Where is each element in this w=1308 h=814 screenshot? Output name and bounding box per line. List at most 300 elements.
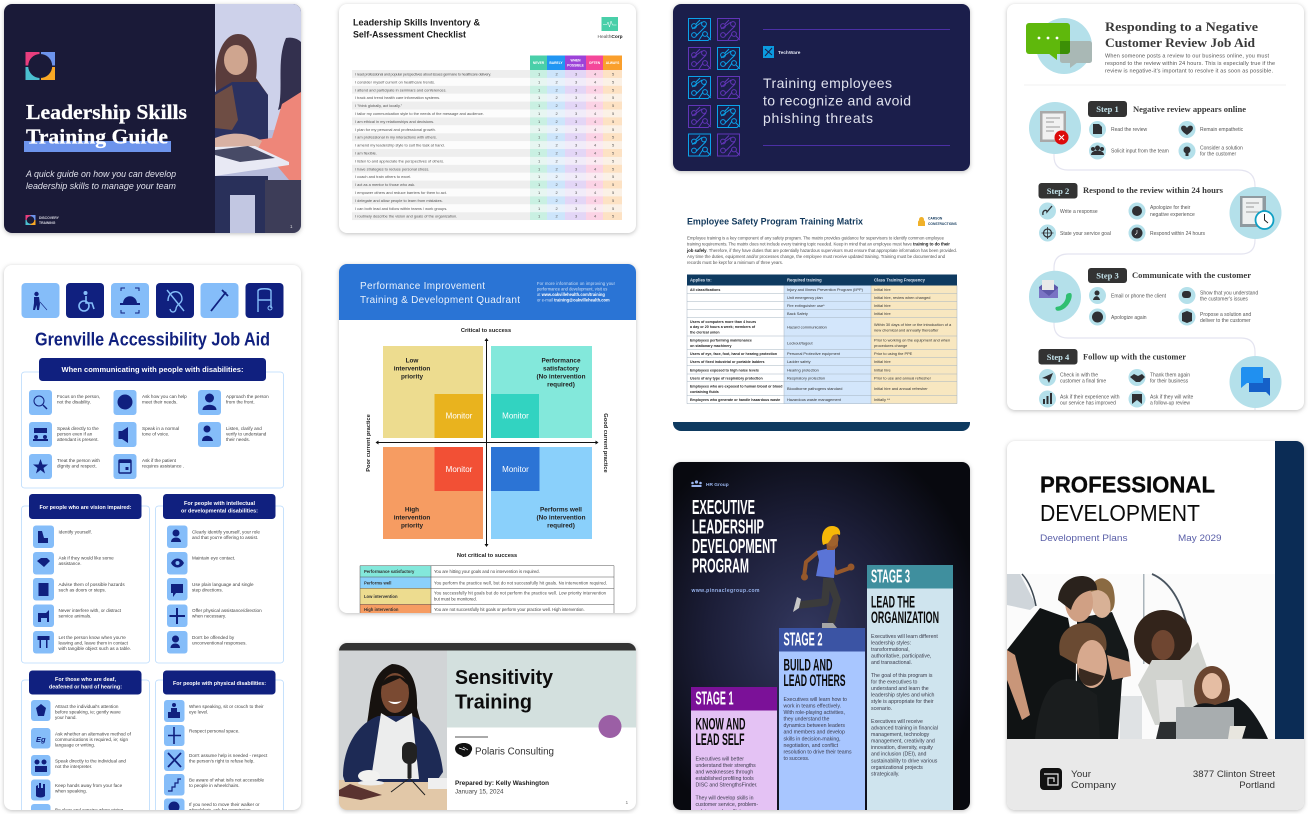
table: I attend and participate in seminars and conferences. bbox=[355, 87, 446, 92]
quadrant: high intervention: Monitor bbox=[446, 465, 473, 474]
section: vision impaired: Let the person know when you're bbox=[58, 635, 126, 640]
brand: hr group bbox=[691, 480, 729, 488]
legend table: Performance satisfactory bbox=[364, 569, 415, 574]
intro paragraph: job safely. Therefore, if they have duties that are potentially hazardous supervisors must ensure that appropriate information has been provided. bbox=[686, 248, 957, 253]
stage 2: and members and develop bbox=[784, 730, 845, 736]
logo: carson constructions bbox=[918, 216, 958, 226]
matrix table: Ladder safety bbox=[787, 359, 811, 364]
panel: leadership skills training guide bbox=[4, 4, 301, 233]
axis labels: Not critical to success bbox=[457, 553, 517, 559]
section: deaf or hard of hearing: deafened or hard of hearing: bbox=[49, 684, 122, 690]
subtitle bbox=[1040, 533, 1222, 543]
logo: your company: Your bbox=[1071, 769, 1091, 779]
matrix table: Initial hire bbox=[874, 367, 891, 372]
quadrant: low intervention bbox=[383, 346, 483, 438]
step 4: Follow up with the customer bbox=[1083, 352, 1186, 362]
prepared by: January 15, 2024 bbox=[455, 788, 504, 796]
stage 3: organizational projects bbox=[871, 765, 923, 771]
quadrant: performs well: Performs well bbox=[540, 506, 582, 514]
subtitle: leadership skills to manage your team bbox=[26, 181, 176, 191]
table: ALWAYS bbox=[606, 61, 620, 65]
table: I empower others and reduce barriers for them to act. bbox=[355, 190, 447, 195]
step 3: Apologize again bbox=[1111, 315, 1147, 321]
quadrant: performance satisfactory bbox=[491, 346, 592, 438]
step 4: Thank them again bbox=[1150, 372, 1190, 378]
section: intellectual disabilities: step directions. bbox=[192, 588, 223, 592]
address: 3877 Clinton Street bbox=[1193, 769, 1275, 780]
table: 12345 bbox=[538, 150, 615, 156]
table: 12345 bbox=[538, 95, 615, 100]
section: communicating: Focus on the person, bbox=[57, 394, 100, 399]
panel: professional development bbox=[1007, 441, 1304, 810]
logo: carson constructions: CONSTRUCTIONS bbox=[928, 222, 958, 226]
legend table bbox=[360, 566, 614, 616]
title bbox=[692, 497, 777, 578]
axis labels: Critical to success bbox=[461, 328, 511, 334]
matrix table: Within 30 days of hire or the introduction of a bbox=[874, 322, 952, 327]
decorative circle bbox=[598, 715, 622, 738]
matrix table bbox=[687, 274, 957, 404]
stage 1: understand their strengths bbox=[696, 763, 756, 769]
photo: two women in discussion: 1 bbox=[290, 224, 293, 229]
highlight bar under title bbox=[24, 141, 171, 152]
title: DEVELOPMENT bbox=[1040, 500, 1200, 526]
legend table: You successfully hit goals but do not perform the practice well. Low priority intervention bbox=[434, 590, 607, 596]
table: 12345 bbox=[538, 190, 615, 195]
stage 2: resolution to drive their teams bbox=[784, 749, 852, 755]
step 3: Show that you understand bbox=[1200, 290, 1258, 296]
table: 12345 bbox=[538, 206, 615, 211]
step 1: Negative review appears online bbox=[1133, 104, 1246, 114]
stage 3: style is appropriate for their bbox=[871, 699, 934, 705]
section: communicating bbox=[22, 358, 284, 488]
legend table: You perform the practice well, but do not successfully hit goals. No intervention required. bbox=[434, 580, 607, 586]
matrix table: the clerical union bbox=[690, 330, 720, 334]
logo: discovery training bbox=[26, 52, 55, 80]
section: deaf or hard of hearing: language or writing. bbox=[55, 742, 95, 748]
icon row: disability categories bbox=[22, 283, 284, 318]
stage 1: DISC and StrengthsFinder. bbox=[696, 782, 758, 788]
title: PROFESSIONAL bbox=[1040, 472, 1215, 498]
matrix table: Hazard communication bbox=[787, 324, 827, 330]
table: I have strategies to reduce personal stress. bbox=[355, 166, 429, 171]
section: deaf or hard of hearing: your hand. bbox=[55, 715, 77, 720]
title bbox=[763, 75, 911, 126]
logo: polaris consulting: Polaris Consulting bbox=[475, 746, 554, 758]
step 2 bbox=[1038, 183, 1282, 242]
table: 12345 bbox=[538, 166, 615, 171]
matrix table: Employees performing maintenance bbox=[690, 338, 752, 342]
stage 2: With role-playing activities, bbox=[784, 710, 845, 716]
logo: your company bbox=[1040, 768, 1116, 790]
section: physical disabilities: to people in wheelchairs. bbox=[189, 783, 240, 788]
intro paragraph: Employee training is a key component of any safety program. The matrix provides guidance for supervisors to identify common employee bbox=[687, 236, 945, 240]
table: OFTEN bbox=[589, 61, 601, 65]
section: vision impaired: For people who are vision impaired: bbox=[40, 505, 132, 511]
section: intellectual disabilities: when necessary. bbox=[192, 614, 226, 618]
header band: Performance Improvement bbox=[360, 281, 485, 292]
table: 12345 bbox=[538, 214, 615, 219]
subtitle: A quick guide on how you can develop bbox=[25, 169, 176, 179]
legend table: Low intervention bbox=[364, 594, 398, 599]
matrix table: a day or 20 hours a week; members of bbox=[690, 325, 756, 329]
title: Leadership Skills bbox=[26, 100, 187, 124]
heading: Employee Safety Program Training Matrix bbox=[687, 216, 864, 228]
icon grid: circuit tiles bbox=[688, 18, 740, 156]
step 4: Ask if their experience with bbox=[1060, 394, 1120, 400]
stage 3: leadership styles: bbox=[871, 640, 911, 646]
matrix table: Hazardous waste management bbox=[787, 397, 842, 402]
heading: Leadership Skills Inventory & bbox=[353, 18, 480, 28]
section: communicating: verify to understand bbox=[226, 432, 267, 436]
matrix table: Respiratory protection bbox=[787, 376, 825, 380]
step 1: for the customer bbox=[1200, 152, 1236, 158]
header band: Training & Development Quadrant bbox=[360, 295, 520, 306]
title: Sensitivity bbox=[455, 666, 554, 689]
stage 3: authoritative, participative, bbox=[871, 654, 931, 660]
intro text: respond to the review within 24 hours. This is especially true if the bbox=[1105, 61, 1275, 67]
matrix table: Prior to working on the equipment and when bbox=[874, 338, 950, 342]
step 1: Solicit input from the team bbox=[1111, 148, 1169, 154]
table: 12345 bbox=[538, 135, 615, 140]
section: intellectual disabilities: Use plain language and single bbox=[192, 582, 254, 587]
stage 1: Executives will better bbox=[696, 756, 744, 762]
section: communicating: requires assistance . bbox=[142, 464, 184, 468]
header illustration: speech bubbles bbox=[1026, 18, 1092, 74]
table bbox=[352, 56, 622, 220]
section: communicating: meet their needs. bbox=[142, 400, 178, 404]
table: 12345 bbox=[538, 79, 615, 84]
logo: techware: TechWare bbox=[778, 50, 801, 56]
stage 3: for the executives to bbox=[871, 680, 918, 686]
photo: two women in discussion bbox=[215, 4, 301, 233]
matrix table: Employees who are exposed to human blood or blood bbox=[690, 384, 782, 388]
photo: team around laptop bbox=[1007, 574, 1275, 739]
matrix table: Initial hire bbox=[874, 287, 891, 292]
intro paragraph bbox=[686, 236, 957, 265]
prepared by bbox=[455, 780, 549, 796]
axis labels: Poor current practice bbox=[366, 414, 372, 472]
matrix table: Fire extinguisher use* bbox=[787, 303, 825, 308]
stage 3: STAGE 3 bbox=[871, 566, 910, 586]
section: deaf or hard of hearing: when speaking. bbox=[55, 788, 87, 794]
section: communicating: attendant is present. bbox=[57, 437, 99, 442]
matrix table: Bloodborne pathogens standard bbox=[787, 386, 842, 391]
subtitle bbox=[25, 169, 176, 191]
step 2: Step 2 bbox=[1047, 186, 1069, 196]
table: 12345 bbox=[538, 127, 615, 132]
section: physical disabilities: If you need to move their walker or bbox=[189, 802, 260, 807]
axis labels: Good current practice bbox=[602, 413, 608, 473]
title: Training employees bbox=[763, 75, 892, 91]
table: WHEN bbox=[570, 58, 581, 62]
step 4 bbox=[1038, 349, 1282, 408]
section: deaf or hard of hearing: not the interpreter. bbox=[55, 764, 92, 769]
section: communicating: person even if an bbox=[57, 432, 93, 436]
matrix table: Lockout/tagout bbox=[787, 340, 813, 345]
heading: Responding to a Negative bbox=[1105, 19, 1258, 34]
stage 2 bbox=[779, 628, 865, 814]
panel: performance improvement quadrant bbox=[339, 264, 636, 616]
intro text bbox=[1105, 54, 1275, 74]
title: DEVELOPMENT bbox=[692, 536, 777, 558]
section: deaf or hard of hearing: Be clear and concise when giving bbox=[55, 808, 124, 812]
section: communicating: When communicating with people with disabilities: bbox=[62, 367, 244, 374]
section: vision impaired: Advise them of possible hazards bbox=[58, 582, 125, 587]
stage 2: dynamics between leaders bbox=[784, 723, 845, 729]
matrix table: Personal Protective equipment bbox=[787, 351, 841, 356]
table: I consider myself current on healthcare trends. bbox=[355, 79, 435, 84]
photo: woman at podcast microphone bbox=[339, 650, 447, 810]
step 1: Read the review bbox=[1111, 127, 1148, 133]
table: 12345 bbox=[538, 174, 615, 179]
stage 2: Executives will learn how to bbox=[784, 697, 847, 703]
section: physical disabilities: Don't assume help is needed - respect bbox=[189, 753, 268, 758]
logo: techware bbox=[763, 46, 801, 58]
table: I coach and train others to excel. bbox=[355, 174, 411, 179]
stage 1: LEAD SELF bbox=[696, 730, 744, 749]
step 3: the customer's issues bbox=[1200, 296, 1248, 302]
matrix table: containing fluids bbox=[690, 390, 719, 394]
panel: self-assessment checklist bbox=[339, 4, 636, 233]
table: I am ethical in my relationships and decisions. bbox=[355, 119, 434, 124]
intro paragraph: Any time the duties, equipment and/or processes change, the employee must receive updated training. Training must be documented and bbox=[687, 254, 946, 259]
address: Portland bbox=[1239, 780, 1275, 791]
side bar bbox=[1275, 441, 1304, 739]
step 3: Communicate with the customer bbox=[1132, 270, 1251, 280]
table: I am flexible. bbox=[355, 150, 377, 156]
heading bbox=[1105, 19, 1258, 50]
matrix table: Initial hire bbox=[874, 311, 891, 316]
table: NEVER bbox=[533, 61, 545, 65]
step 4: Check in with the bbox=[1060, 372, 1098, 378]
matrix table: Employees exposed to high noise levels bbox=[690, 368, 759, 372]
stage 1: STAGE 1 bbox=[696, 688, 734, 708]
panel: sensitivity training bbox=[339, 643, 636, 810]
quadrant: performance satisfactory: Performance bbox=[541, 358, 581, 364]
matrix table: Class Training Frequency bbox=[874, 278, 926, 282]
stage 1: KNOW AND bbox=[696, 714, 746, 734]
table: I routinely describe the vision and goals of the organization. bbox=[355, 214, 457, 219]
quadrant: performs well bbox=[491, 447, 592, 539]
section: communicating: Ask how you can help bbox=[142, 394, 187, 399]
matrix table: Injury and Illness Prevention Program (IIPP) bbox=[787, 287, 864, 292]
stage 2: BUILD AND bbox=[784, 656, 832, 674]
section: intellectual disabilities: or developmental disabilities: bbox=[181, 508, 258, 514]
intro text: review is negative-it's important to resolve it as soon as possible. bbox=[1105, 68, 1273, 74]
step 2: Write a response bbox=[1060, 209, 1098, 215]
stage 1: They will develop skills in bbox=[696, 796, 754, 802]
table: 12345 bbox=[538, 119, 615, 124]
arrows: axes bbox=[376, 338, 598, 547]
header band: For more information on improving your bbox=[537, 281, 616, 286]
table: 12345 bbox=[538, 198, 615, 203]
matrix table: Initially ** bbox=[874, 397, 890, 402]
heading bbox=[353, 18, 480, 40]
stage 1 bbox=[691, 687, 777, 814]
step 4: customer a final time bbox=[1060, 379, 1106, 385]
table: POSSIBLE bbox=[567, 64, 585, 68]
section: communicating: Listen, clarify and bbox=[226, 426, 262, 431]
quadrant: performs well: required) bbox=[547, 522, 575, 530]
stage 2: negotiation, and conflict bbox=[784, 743, 839, 749]
matrix table: Initial hire bbox=[874, 303, 891, 308]
section: deaf or hard of hearing bbox=[22, 670, 150, 814]
section: vision impaired: such as doors or steps. bbox=[58, 588, 106, 592]
step 2: State your service goal bbox=[1060, 231, 1111, 237]
footer brand: TRAINING bbox=[39, 221, 56, 225]
footer bar bbox=[673, 422, 970, 431]
header band: performance and development, visit us bbox=[537, 286, 607, 292]
logo: your company: Company bbox=[1071, 780, 1116, 790]
step 1: Remain empathetic bbox=[1200, 127, 1244, 133]
matrix table: Users of computers more than 4 hours bbox=[690, 320, 756, 324]
legend table: but must be monitored. bbox=[434, 596, 477, 602]
step 3: Email or phone the client bbox=[1111, 294, 1167, 300]
stage 3 bbox=[867, 565, 953, 814]
stage 3: Executives will receive bbox=[871, 719, 923, 725]
step 4: Step 4 bbox=[1047, 352, 1070, 362]
stage 3: and transactional. bbox=[871, 660, 912, 666]
section: communicating: Ask if the patient bbox=[142, 458, 177, 463]
stage 3: Executives will learn different bbox=[871, 634, 938, 640]
stage 3: The goal of this program is bbox=[871, 673, 933, 679]
table: I "think globally, act locally." bbox=[355, 103, 403, 108]
section: communicating: dignity and respect. bbox=[57, 464, 97, 468]
section: physical disabilities: For people with physical disabilities: bbox=[173, 681, 266, 687]
section: deaf or hard of hearing: For those who are deaf, bbox=[55, 677, 116, 683]
logo: healthcorp: HealthCorp bbox=[598, 34, 623, 40]
section: communicating: Speak directly to the bbox=[57, 426, 99, 431]
table: I listen to and appreciate the perspectives of others. bbox=[355, 158, 444, 163]
panel: sensitivity training: 1 bbox=[626, 800, 628, 806]
subtitle: May 2029 bbox=[1178, 533, 1222, 543]
section: communicating: not the disability. bbox=[57, 400, 91, 404]
intro paragraph: training requirements. The matrix does not include every training topic needed. Keep in mind that an employee must have training to do their bbox=[687, 242, 950, 246]
quadrant: performance satisfactory: satisfactory bbox=[543, 366, 579, 372]
matrix table: Back Safety bbox=[787, 311, 808, 316]
section: intellectual disabilities: Offer physical assistance/direction bbox=[192, 608, 262, 613]
title bbox=[1040, 472, 1215, 526]
stage 3: and inclusion (DEI), and bbox=[871, 752, 926, 758]
section: intellectual disabilities: Maintain eye contact. bbox=[192, 556, 235, 560]
table: I amend my leadership style to suit the task at hand. bbox=[355, 143, 445, 148]
table: I delegate and allow people to learn from mistakes. bbox=[355, 198, 443, 203]
table: 12345 bbox=[538, 87, 615, 92]
panel: executive leadership development program bbox=[673, 462, 970, 814]
title: PROGRAM bbox=[692, 556, 749, 578]
stage 3: strategically. bbox=[871, 771, 899, 777]
section: intellectual disabilities: Clearly identify yourself, your role bbox=[192, 530, 260, 534]
logo: healthcorp bbox=[598, 17, 623, 40]
section: intellectual disabilities: and that you're offering to assist. bbox=[192, 535, 258, 540]
section: physical disabilities bbox=[156, 670, 284, 814]
matrix table: Initial hire and annual refresher bbox=[874, 386, 928, 391]
section: intellectual disabilities bbox=[156, 494, 284, 663]
section: communicating: Speak in a normal bbox=[142, 426, 179, 431]
step 2: Apologize for their bbox=[1150, 205, 1191, 211]
matrix table: Initial hire, review when changed bbox=[874, 295, 930, 300]
table: I can both lead and follow within teams / work groups. bbox=[355, 206, 447, 211]
footer brand: DISCOVERY bbox=[39, 216, 60, 220]
section: vision impaired: with tangible object such as a table. bbox=[58, 646, 131, 651]
intro paragraph: records must be kept for a minimum of three years. bbox=[687, 260, 783, 265]
stage 3: scenario. bbox=[871, 706, 892, 712]
table: I track and trend health care information systems. bbox=[355, 95, 440, 100]
section: communicating: tone of voice. bbox=[142, 432, 169, 436]
title: LEADERSHIP bbox=[692, 516, 764, 538]
stage 2: they understand the bbox=[784, 717, 829, 723]
quadrant: performs well: Monitor bbox=[502, 465, 529, 474]
title bbox=[455, 666, 554, 714]
section: vision impaired: Never interfere with, or distract bbox=[58, 608, 122, 613]
section: deaf or hard of hearing: Eg bbox=[36, 735, 46, 744]
quadrant: high intervention bbox=[383, 447, 483, 539]
heading: Customer Review Job Aid bbox=[1105, 35, 1256, 50]
section: communicating: their needs. bbox=[226, 437, 250, 442]
panel: phishing threats training bbox=[673, 4, 970, 171]
stage 3: management, technology bbox=[871, 732, 930, 738]
quadrant: low intervention: intervention bbox=[394, 366, 430, 372]
illustration: running figure bbox=[793, 526, 854, 628]
stage 1: customer service, problem- bbox=[696, 802, 758, 808]
quadrant: low intervention: priority bbox=[401, 374, 423, 380]
matrix table: Initial hire bbox=[874, 359, 891, 364]
legend table: Performs well bbox=[364, 580, 391, 586]
subtitle: Development Plans bbox=[1040, 533, 1128, 543]
step 3 bbox=[1029, 268, 1258, 326]
title line 2: Training Guide bbox=[26, 124, 168, 148]
step 2: negative experience bbox=[1150, 212, 1195, 218]
table: 12345 bbox=[538, 182, 615, 187]
connector path bbox=[1054, 150, 1255, 410]
prepared by: Prepared by: Kelly Washington bbox=[455, 780, 549, 787]
intro text: When someone posts a review to our business online, you must bbox=[1105, 54, 1269, 60]
footer band bbox=[1007, 739, 1304, 810]
table: I plan for my personal and professional growth. bbox=[355, 127, 436, 132]
stage 2: LEAD OTHERS bbox=[784, 671, 846, 690]
section: deaf or hard of hearing: Keep hands away from your face bbox=[55, 783, 123, 788]
matrix table: Hearing protection bbox=[787, 367, 819, 372]
table: I act as a mentor to those who ask. bbox=[355, 182, 415, 187]
step 4: for their business bbox=[1150, 379, 1189, 385]
matrix table: procedures change bbox=[874, 343, 907, 348]
quadrant: performance satisfactory: required) bbox=[547, 382, 575, 388]
section: intellectual disabilities: Don't be offended by bbox=[192, 635, 235, 640]
table: 12345 bbox=[538, 111, 615, 116]
matrix table: Users of eye, face, foot, hand or hearing protection bbox=[690, 352, 777, 356]
step 4: Ask if they will write bbox=[1150, 394, 1194, 400]
table: I tailor my communication style to the needs of the message and audience. bbox=[355, 111, 484, 116]
section: deaf or hard of hearing: communications is required, ie; sign bbox=[55, 737, 128, 742]
matrix table: All classifications bbox=[690, 288, 720, 292]
quadrant: high intervention: High bbox=[405, 506, 419, 514]
matrix table: Prior to use and annual refresher bbox=[874, 376, 932, 380]
legend table: You are hitting your goals and no intervention is required. bbox=[434, 569, 540, 574]
table: I am professional in my interactions with others. bbox=[355, 135, 437, 140]
legend table: High intervention bbox=[364, 607, 399, 612]
step 1 bbox=[1029, 101, 1246, 160]
title: Grenville Accessibility Job Aid bbox=[35, 330, 270, 350]
table: 12345 bbox=[538, 158, 615, 163]
step 4: a follow-up review bbox=[1150, 401, 1190, 407]
address bbox=[1193, 769, 1275, 791]
section: physical disabilities: When speaking, sit or crouch to their bbox=[189, 704, 264, 709]
stage 3: LEAD THE bbox=[871, 592, 915, 612]
brand: hr group: HR Group bbox=[706, 482, 729, 488]
stage 3: management, creativity and bbox=[871, 739, 935, 745]
matrix table: Employees who generate or handle hazardous waste bbox=[690, 398, 780, 402]
